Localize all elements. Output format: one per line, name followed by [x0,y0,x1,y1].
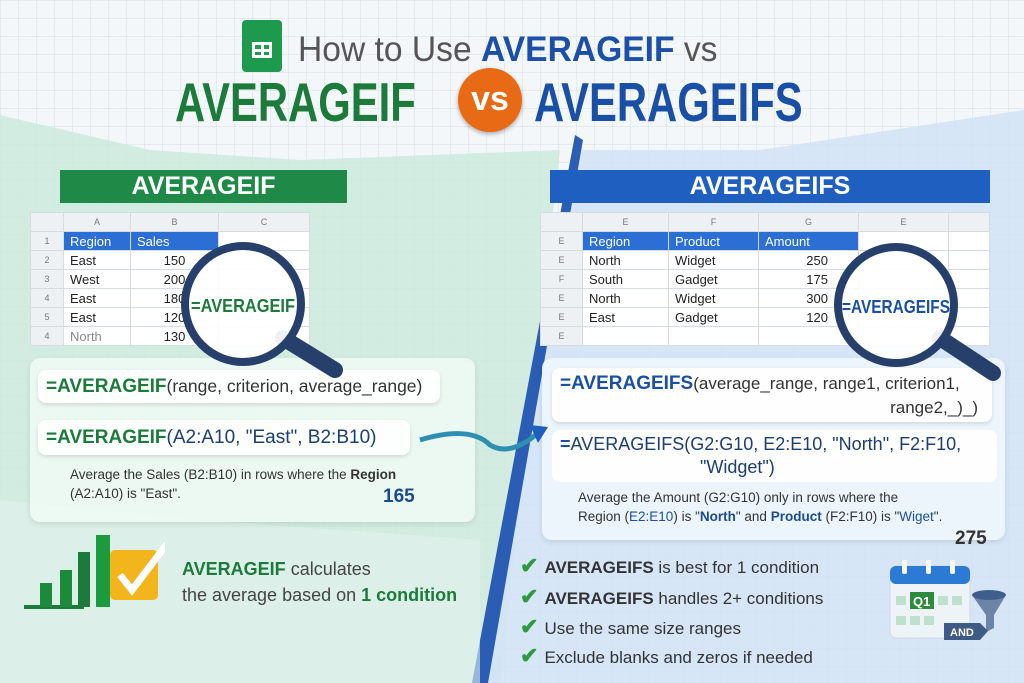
table: B [171,217,178,227]
heading: AVERAGEIFS [690,172,850,200]
table: Widget [675,290,715,306]
formula example: =AVERAGEIFS(G2:G10, E2:E10, "North", F2:F10, [560,434,961,454]
table: Product [675,234,720,248]
table: East [70,290,96,306]
table: 2 [44,255,50,265]
formula example [552,430,997,482]
icon: bar chart with check [24,535,165,609]
formula syntax: range2,_)_) [890,398,978,417]
table: E [558,331,564,341]
panel: AVERAGEIF [29,170,476,525]
description: Average the Sales (B2:B10) in rows where the Region [70,467,396,482]
vs badge: vs [471,80,509,118]
table: Widget [675,252,715,268]
table: E [558,293,564,303]
formula example [38,420,410,455]
icon: magnifier left: =AVERAGEIF [191,296,295,316]
table: 300 [806,290,828,306]
formula panel [542,358,1005,540]
title line 2: AVERAGEIF [175,71,416,133]
title: AVERAGEIFS [534,71,803,133]
icon: magnifier right: =AVERAGEIFS [842,297,950,317]
table: Amount [765,234,810,248]
title [175,20,803,136]
table: West [70,272,99,286]
table: North [589,290,621,306]
heading [550,170,990,203]
panel: AVERAGEIFS [540,170,1006,549]
heading [60,170,347,203]
text: ✔ AVERAGEIFS handles 2+ conditions [520,584,823,609]
table: G [805,217,812,227]
title line 1: How to Use AVERAGEIF vs [298,30,717,69]
table: East [70,252,96,268]
text: averageif summary [182,559,457,605]
formula panel [30,358,475,522]
table: East [589,310,615,324]
table: E [622,217,628,227]
text: ✔ AVERAGEIFS is best for 1 condition [520,553,819,578]
table: 150 [164,252,185,268]
table: 120 [164,310,185,324]
table: C [261,217,267,227]
table: 3 [44,274,50,284]
table: F [559,274,564,284]
description: Region (E2:E10) is "North" and Product (F2:F10) is "Wiget". [578,509,942,524]
description [578,490,942,524]
icon: magnifier right [834,243,1001,381]
icon: calendar funnel: Q1 [913,594,930,609]
table: E [900,217,906,227]
table: East [70,310,96,324]
table: E [558,236,564,246]
text: ✔ Use the same size ranges [520,614,741,639]
icon: calendar funnel [890,560,1006,640]
formula syntax [38,370,440,403]
heading: AVERAGEIF [132,172,276,200]
table: 250 [806,252,828,268]
table: North [589,252,621,268]
table: 4 [44,331,50,341]
formula syntax: =AVERAGEIFS(average_range, range1, criterion1, [560,373,960,394]
table: 200 [164,272,185,286]
table: E [558,255,564,265]
formula example: =AVERAGEIF(A2:A10, "East", B2:B10) [46,427,376,448]
table: 120 [806,310,828,324]
icon: magnifier left [181,242,343,378]
table: 175 [806,272,828,286]
table: Gadget [675,272,718,286]
table [540,212,990,346]
table: Region [589,234,630,248]
description [70,467,396,501]
table: 5 [44,312,50,322]
description: (A2:A10) is "East". [70,486,181,501]
table: 180 [164,290,185,306]
icon: sheets [242,20,282,72]
table: E [558,312,564,322]
table [30,212,310,346]
table: F [711,217,716,227]
table: A [94,217,100,227]
text: ✔ Exclude blanks and zeros if needed [520,643,813,668]
result: 165 [383,486,415,507]
table: Sales [137,234,170,248]
table: Region [70,234,111,248]
checklist [520,553,823,668]
formula example: "Widget") [700,457,775,477]
icon: calendar funnel: AND [950,627,974,639]
text: averageif summary: AVERAGEIF calculates [182,559,371,579]
arrow [419,425,548,452]
table: North [70,328,102,344]
description: Average the Amount (G2:G10) only in rows where the [578,490,898,505]
table: 4 [44,293,50,303]
table: 1 [44,236,50,246]
text: averageif summary: the average based on 1 condition [182,585,457,605]
formula syntax: =AVERAGEIF(range, criterion, average_range) [46,376,422,397]
formula syntax [552,368,992,422]
table: Gadget [675,310,718,324]
table: South [589,272,623,286]
result: 275 [955,528,987,549]
table: 130 [164,328,185,344]
vs badge [458,68,522,132]
